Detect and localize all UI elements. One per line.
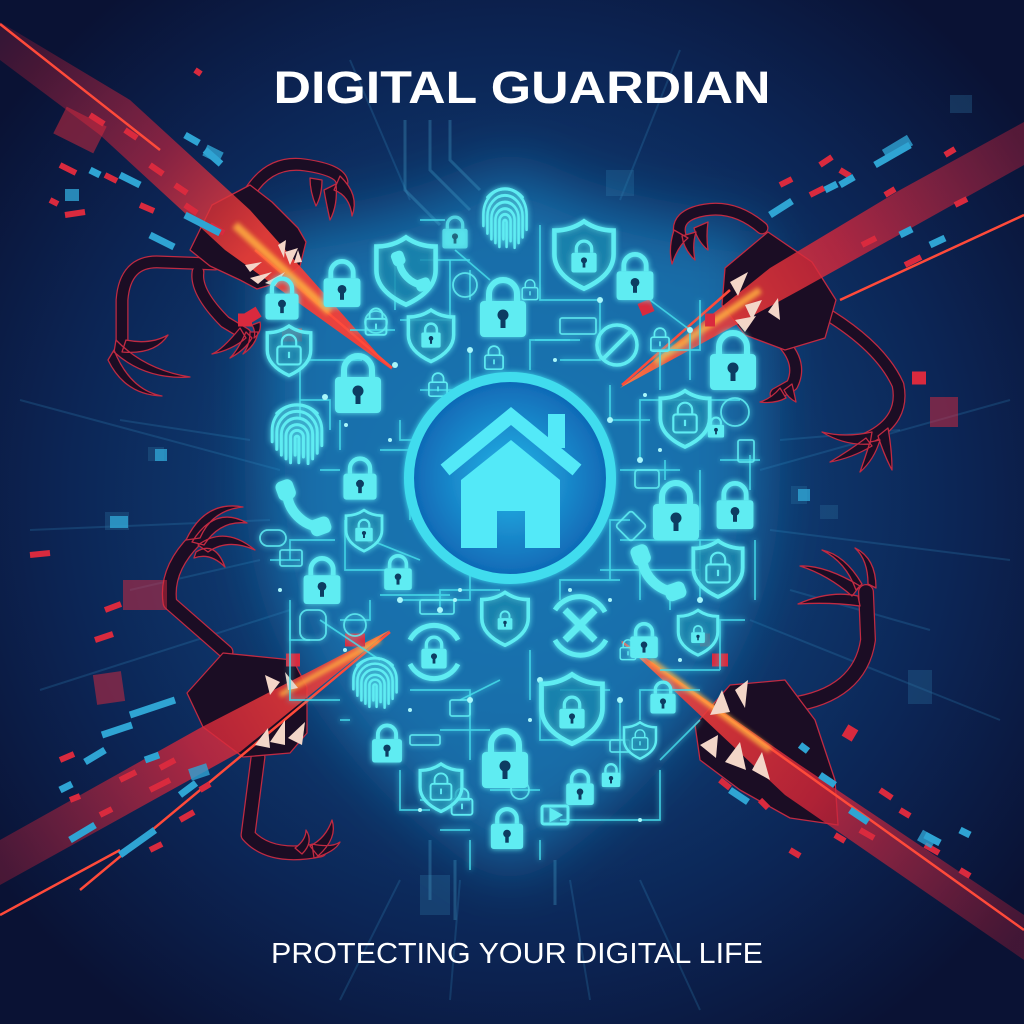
monster: top-right (670, 209, 899, 472)
house icon (445, 414, 577, 548)
beam: top-right (620, 122, 1024, 388)
red debris fragments (30, 70, 970, 876)
beam: top-left (0, 22, 392, 370)
subtitle: PROTECTING YOUR DIGITAL LIFE (271, 938, 763, 970)
monster: bottom-left (169, 506, 340, 858)
icon: fingerprints (272, 189, 527, 708)
emblem ring (409, 377, 611, 579)
node dots (278, 297, 703, 822)
icon: padlock inside arrows (421, 637, 447, 668)
icon: phones (274, 478, 688, 603)
small outlined circuit icons (260, 273, 754, 799)
monster: bottom-right (695, 548, 876, 825)
icon: media play (542, 806, 568, 824)
beam: bottom-right (620, 640, 1024, 960)
icon: circular arrows with lock (410, 325, 637, 679)
shield circuitry (270, 220, 760, 870)
circuit traces above and below shield (405, 120, 555, 920)
security icon cluster (265, 189, 756, 849)
shield glow (265, 165, 760, 870)
title: DIGITAL GUARDIAN (274, 62, 770, 113)
monster fangs (245, 240, 780, 780)
icon: shield cluster (267, 221, 743, 811)
central house emblem (409, 377, 611, 579)
blue debris fragments (60, 135, 970, 855)
faded background blocks (105, 95, 972, 915)
icon: padlock cluster (265, 217, 756, 849)
beam: bottom-left (0, 630, 390, 915)
monster: top-left (108, 164, 354, 396)
